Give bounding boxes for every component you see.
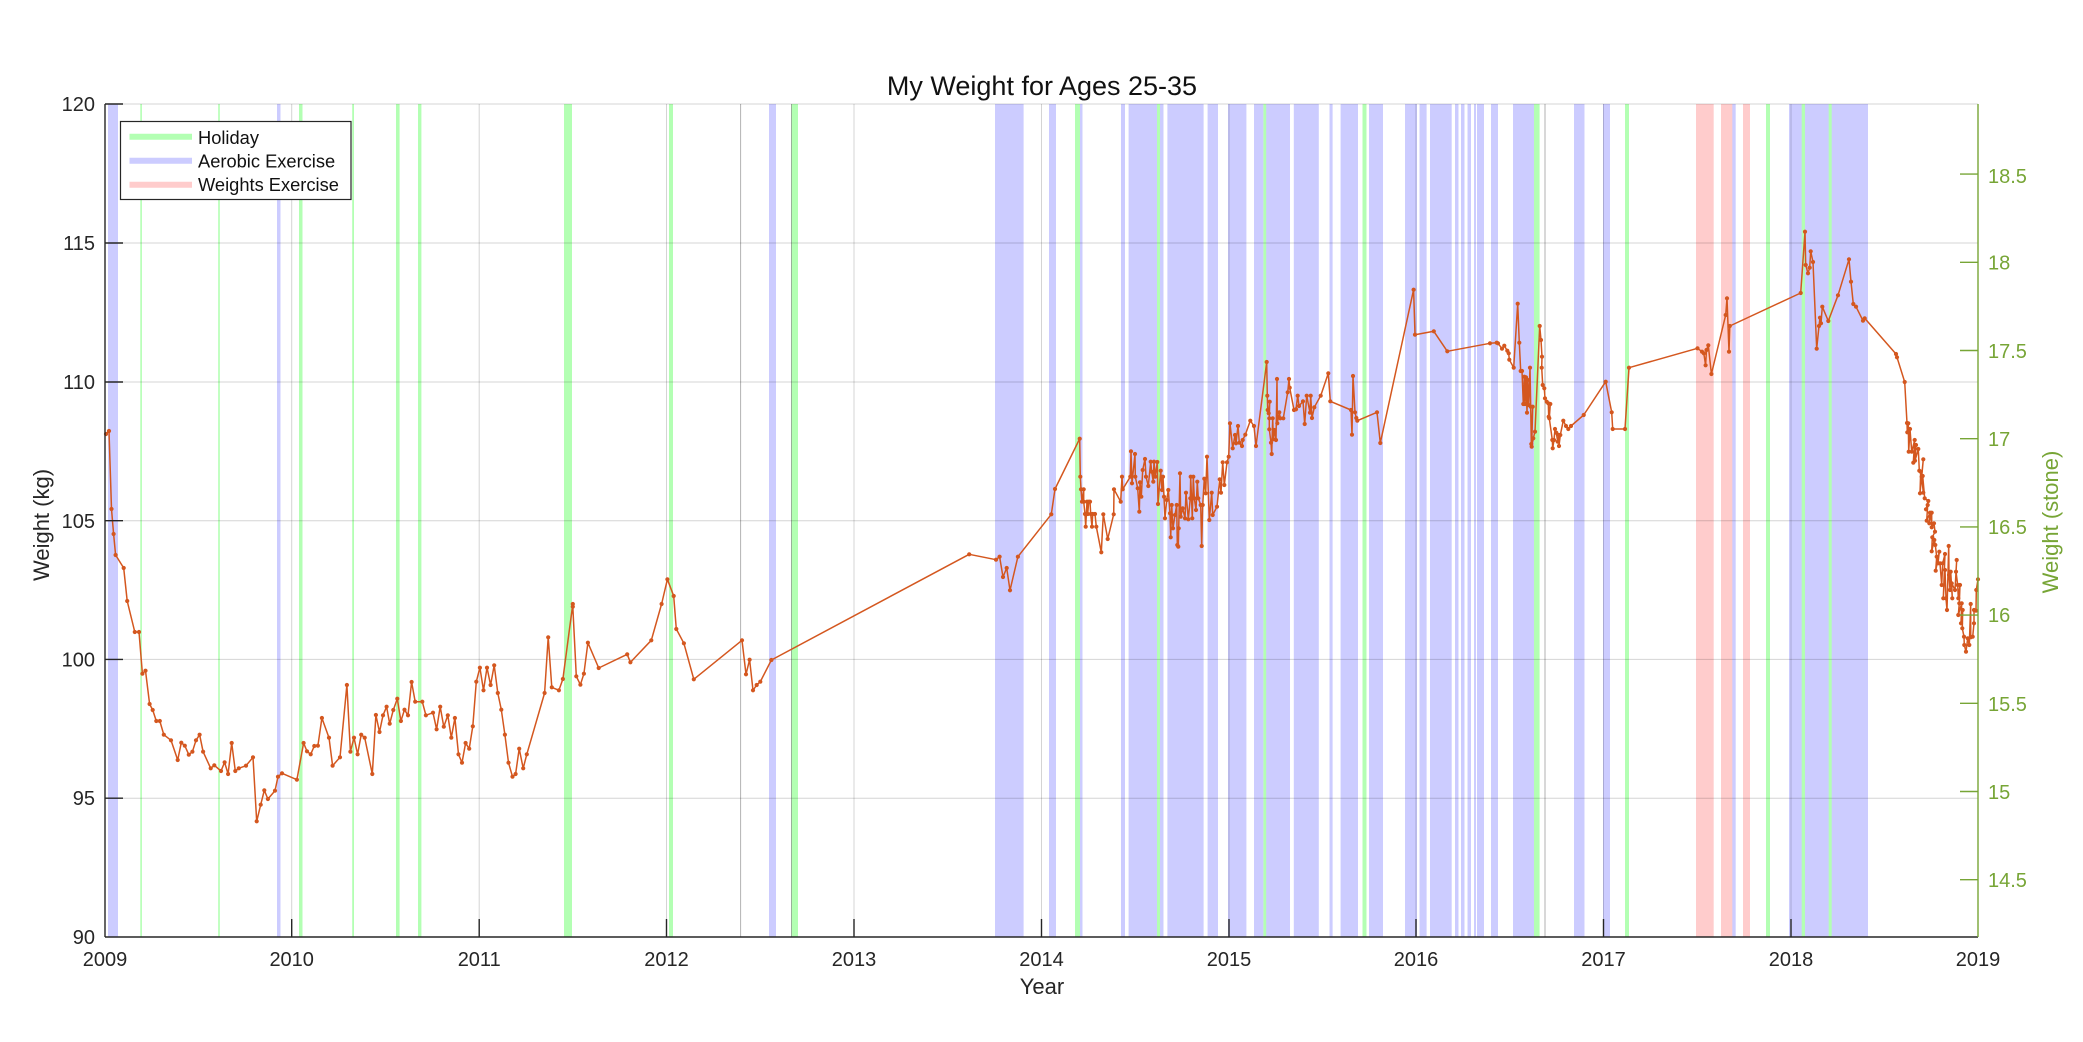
left axis with ticks: 100	[62, 650, 95, 672]
bottom axis with year ticks	[83, 919, 2000, 971]
bottom axis with year ticks: 2013	[832, 949, 876, 971]
title: My Weight for Ages 25-35	[887, 71, 1197, 101]
right axis with stone ticks: 15	[1988, 782, 2010, 804]
right y axis label: Weight (stone)	[2038, 451, 2063, 593]
legend: Weights Exercise	[198, 174, 339, 195]
left y axis label: Weight (kg)	[29, 469, 54, 581]
legend	[120, 122, 351, 200]
holiday bands	[140, 104, 1832, 937]
right axis with stone ticks: 14.5	[1988, 870, 2027, 892]
left axis with ticks: 105	[62, 511, 95, 533]
legend: Aerobic Exercise	[198, 150, 335, 172]
left axis with ticks: 115	[63, 233, 95, 255]
bottom axis with year ticks: 2016	[1394, 949, 1438, 971]
right axis with stone ticks: 18.5	[1988, 166, 2027, 188]
bottom axis with year ticks: 2019	[1956, 949, 2000, 971]
left axis with ticks: 90	[73, 927, 95, 949]
left axis with ticks	[62, 94, 123, 949]
aerobic exercise bands	[108, 104, 1868, 937]
right axis with stone ticks: 16	[1988, 605, 2010, 627]
weights exercise bands	[1696, 104, 1750, 937]
x axis label: Year	[1020, 974, 1064, 999]
left axis with ticks: 110	[63, 372, 95, 394]
left axis with ticks: 95	[73, 788, 95, 810]
bottom axis with year ticks: 2011	[458, 949, 501, 971]
right axis with stone ticks: 18	[1988, 252, 2010, 274]
right axis with stone ticks: 17.5	[1988, 341, 2027, 363]
right axis with stone ticks: 16.5	[1988, 517, 2027, 539]
left axis with ticks: 120	[62, 94, 95, 116]
right axis with stone ticks: 17	[1988, 429, 2010, 451]
bottom axis with year ticks: 2009	[83, 949, 127, 971]
legend: Holiday	[198, 127, 260, 148]
bottom axis with year ticks: 2017	[1581, 949, 1626, 971]
bottom axis with year ticks: 2010	[269, 949, 314, 971]
bottom axis with year ticks: 2015	[1207, 949, 1251, 971]
right axis with stone ticks	[1960, 104, 2027, 937]
bottom axis with year ticks: 2012	[644, 949, 689, 971]
weight data line	[106, 232, 1978, 821]
bottom axis with year ticks: 2018	[1769, 949, 1813, 971]
right axis with stone ticks: 15.5	[1988, 694, 2027, 716]
bottom axis with year ticks: 2014	[1019, 949, 1064, 971]
